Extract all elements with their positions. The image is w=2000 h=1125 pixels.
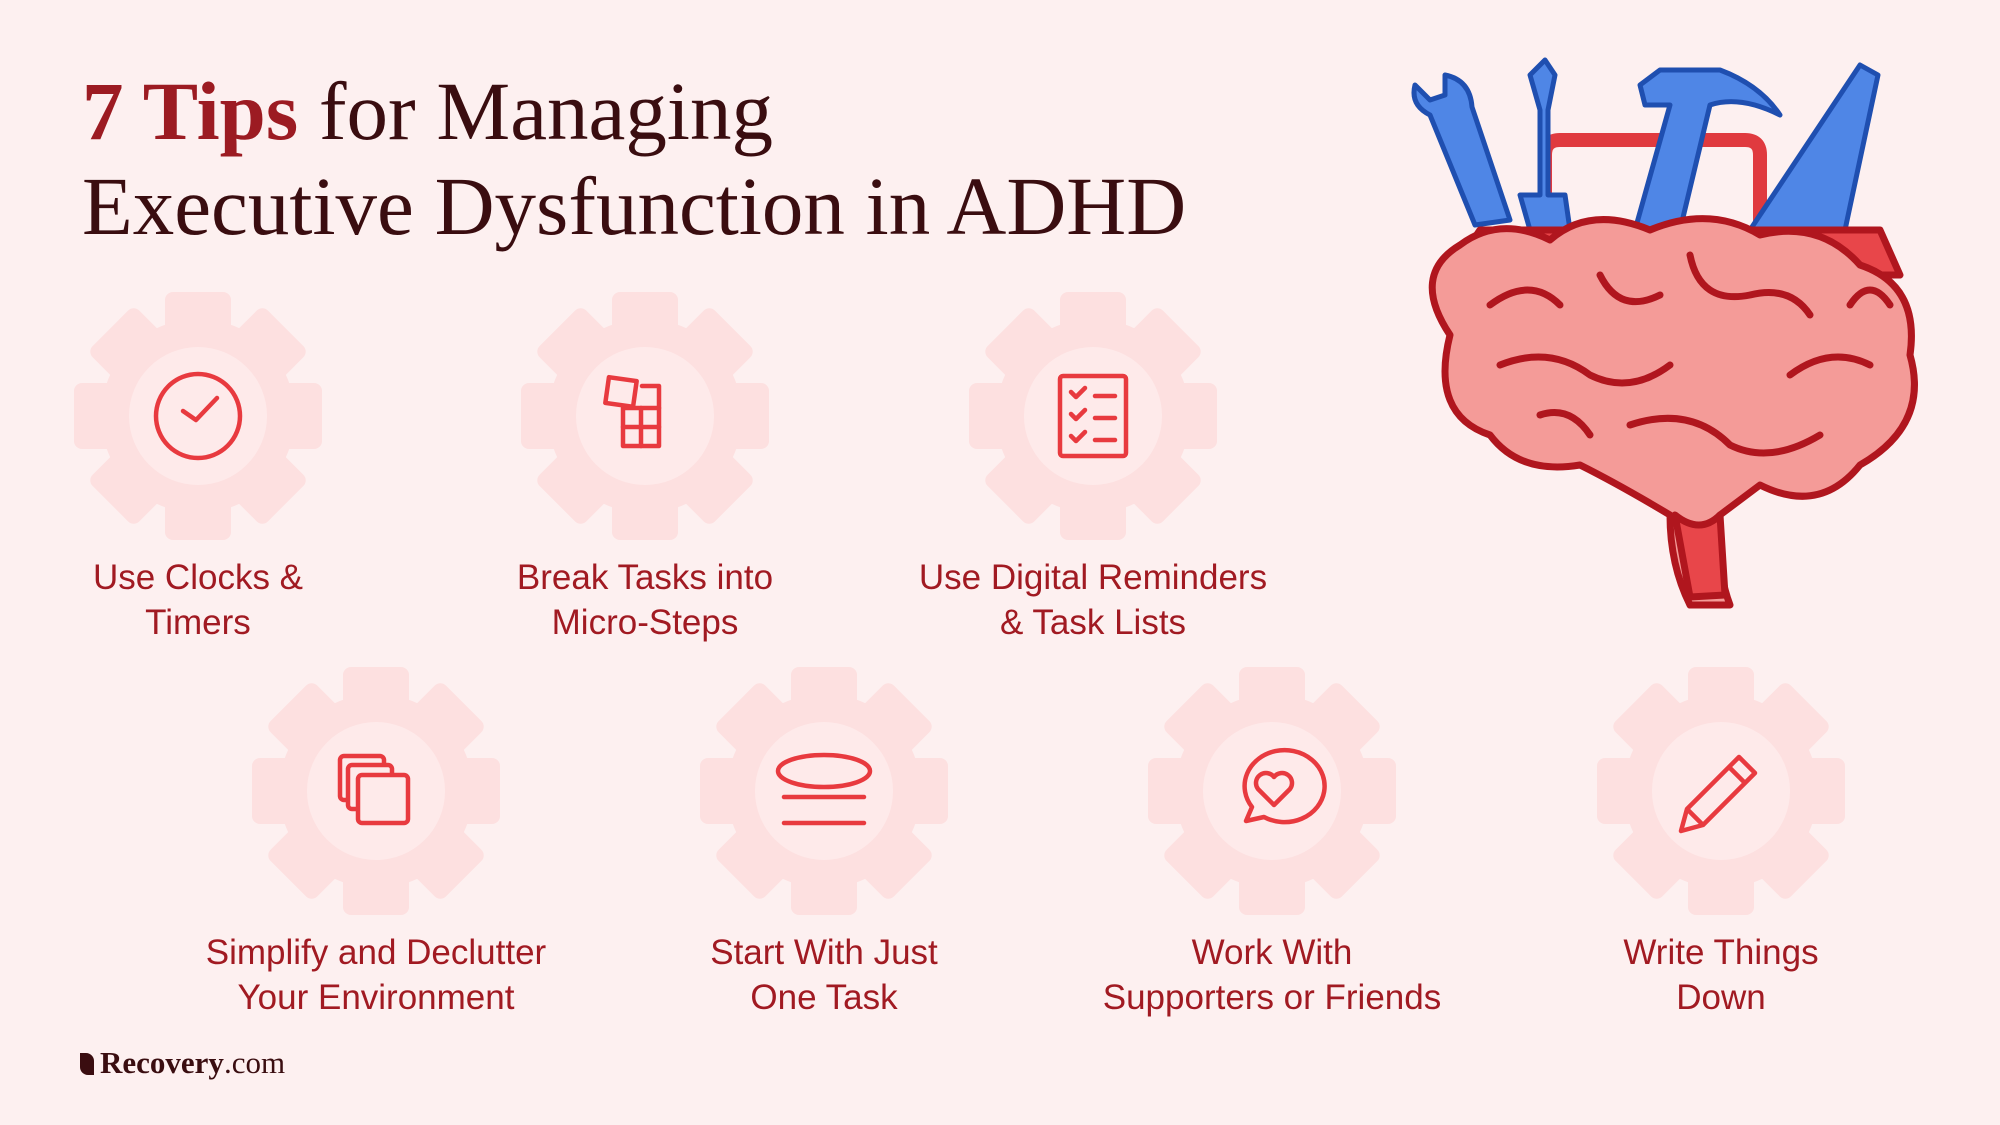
gear: clocks <box>74 292 322 540</box>
text: Work With <box>1192 933 1352 972</box>
gear: write <box>1597 667 1845 915</box>
text: One Task <box>750 978 898 1017</box>
text: Down <box>1676 978 1766 1017</box>
tools <box>1414 60 1878 230</box>
title: 7 Tips for Managing <box>82 65 773 157</box>
text: Simplify and Declutter <box>206 933 546 972</box>
gear: declutter <box>252 667 500 915</box>
title: Executive Dysfunction in ADHD <box>82 160 1186 252</box>
title <box>82 65 1186 252</box>
text: Break Tasks into <box>517 558 773 597</box>
illustration: brain toolbox <box>1411 58 1918 608</box>
gear: one task <box>700 667 948 915</box>
labels <box>93 558 303 642</box>
labels: Use Clocks & <box>93 558 303 597</box>
brain <box>1432 219 1914 605</box>
logo: Recovery.com <box>100 1045 285 1080</box>
text: Micro-Steps <box>552 603 738 642</box>
gear: supporters <box>1148 667 1396 915</box>
gear: digital reminders <box>969 292 1217 540</box>
labels: Timers <box>145 603 251 642</box>
gear: micro-steps <box>521 292 769 540</box>
text: & Task Lists <box>1000 603 1186 642</box>
text: Write Things <box>1623 933 1819 972</box>
text: Your Environment <box>238 978 514 1017</box>
text: Start With Just <box>710 933 938 972</box>
text: Supporters or Friends <box>1103 978 1441 1017</box>
text: Use Digital Reminders <box>919 558 1267 597</box>
toolbox handle <box>1545 140 1760 220</box>
toolbox body <box>1450 230 1900 275</box>
